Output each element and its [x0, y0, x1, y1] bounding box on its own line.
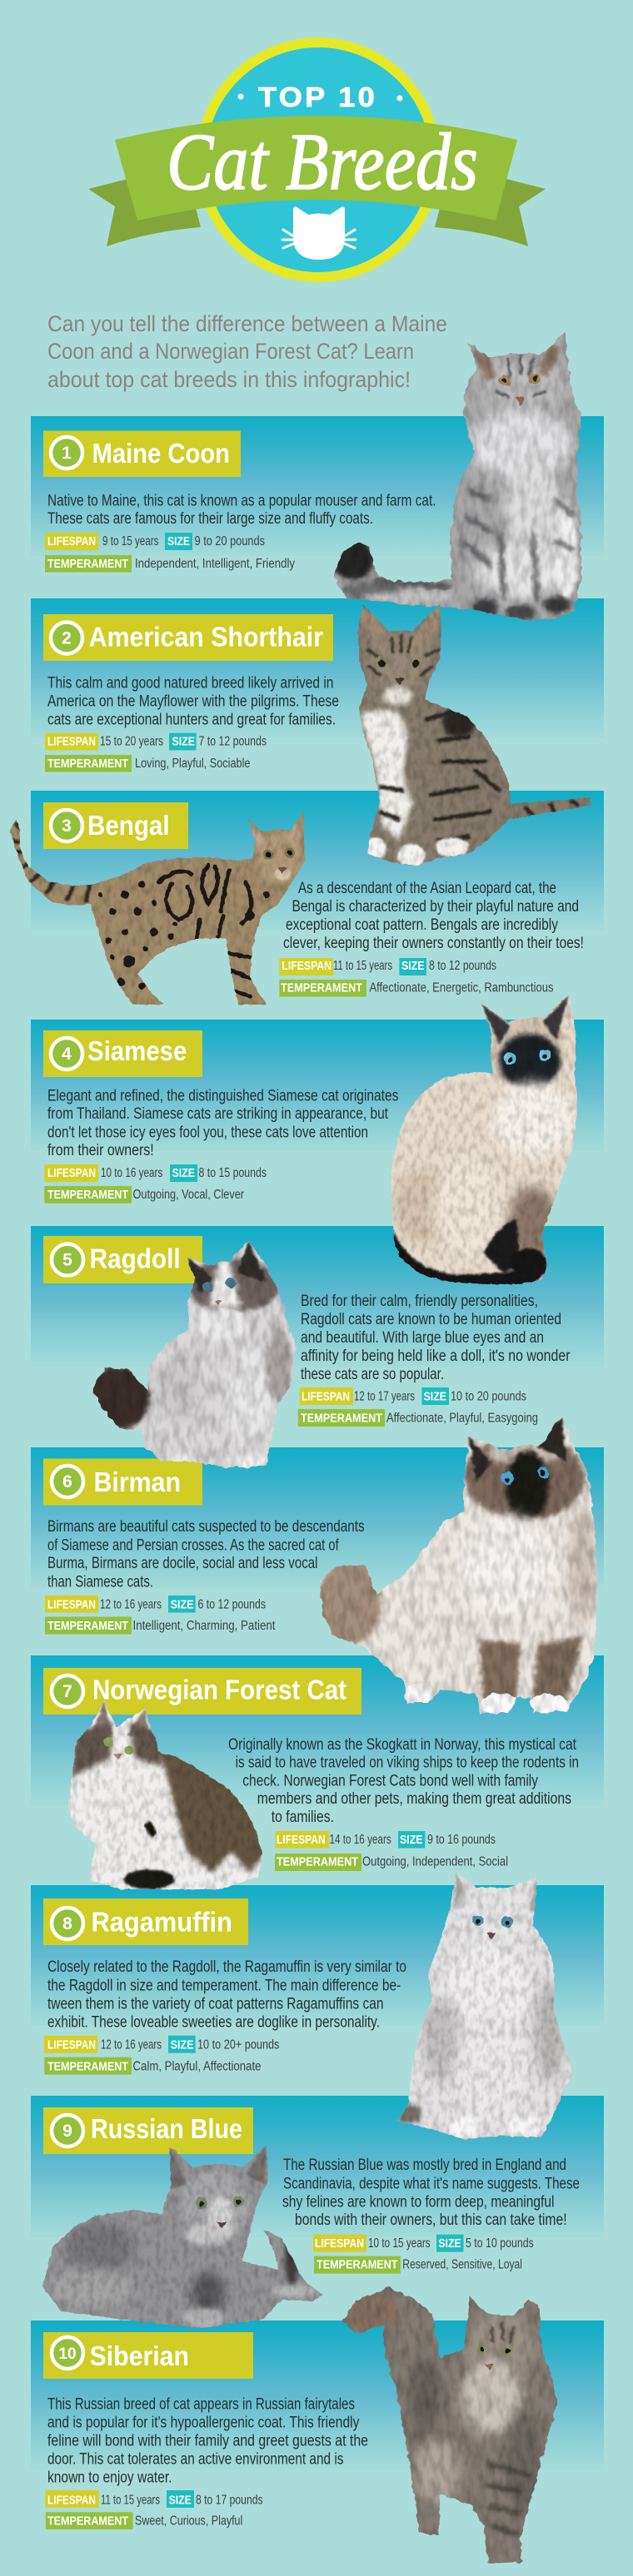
stats: American Shorthair: SIZE: [172, 735, 195, 749]
logo badge: [88, 37, 546, 282]
text block: Ragamuffin: tween them is the variety of coat patterns Ragamuffins can: [47, 1995, 383, 2013]
heading: Bengal: Bengal: [87, 810, 170, 841]
text block: Ragamuffin: Closely related to the Ragdoll, the Ragamuffin is very similar to: [47, 1958, 406, 1976]
stats: Norwegian Forest Cat: LIFESPAN: [277, 1833, 326, 1847]
heading: Ragdoll: Ragdoll: [90, 1243, 181, 1274]
text block: Siamese: don't let those icy eyes fool you, these cats love attention: [47, 1124, 368, 1141]
text block: Siberian: [47, 2395, 368, 2486]
heading: Norwegian Forest Cat: 7: [62, 1682, 72, 1701]
text block: Siberian: feline will bond with their family and greet guests at the: [47, 2432, 368, 2449]
text block: Siamese: Elegant and refined, the distinguished Siamese cat originates: [47, 1087, 398, 1105]
heading: Siamese: Siamese: [87, 1035, 187, 1066]
heading: Birman: Birman: [93, 1467, 181, 1497]
stats: Russian Blue: LIFESPAN: [315, 2236, 364, 2251]
stats: Russian Blue: Reserved, Sensitive, Loyal: [402, 2258, 522, 2272]
band: Russian Blue: [31, 2096, 604, 2237]
text block: Russian Blue: shy felines are known to form deep, meaningful: [282, 2194, 555, 2211]
stats: Norwegian Forest Cat: [275, 1831, 508, 1871]
cat: American Shorthair: [354, 599, 596, 870]
text block: Russian Blue: The Russian Blue was mostly bred in England and: [283, 2157, 566, 2174]
stats: Maine Coon: 9 to 20 pounds: [195, 534, 265, 548]
stats: Ragdoll: 12 to 17 years: [354, 1390, 415, 1403]
heading: Siberian: Siberian: [90, 2340, 189, 2371]
stats: Ragamuffin: SIZE: [171, 2038, 194, 2052]
stats: Norwegian Forest Cat: SIZE: [400, 1833, 423, 1847]
stats: Siamese: Outgoing, Vocal, Clever: [133, 1188, 244, 1202]
stats: Maine Coon: LIFESPAN: [47, 534, 96, 548]
band: Ragamuffin: [31, 1885, 604, 2025]
stats: Ragamuffin: LIFESPAN: [47, 2038, 96, 2052]
text block: Siberian: known to enjoy water.: [47, 2469, 172, 2486]
text block: Norwegian Forest Cat: check. Norwegian Forest Cats bond well with family: [242, 1773, 538, 1789]
cat: Russian Blue: [37, 2139, 329, 2332]
stats: Birman: Intelligent, Charming, Patient: [133, 1619, 276, 1633]
text block: American Shorthair: America on the Mayflower with the pilgrims. These: [47, 693, 339, 711]
text block: Siamese: [47, 1087, 398, 1159]
stats: Ragamuffin: [44, 2036, 280, 2075]
stats: Russian Blue: TEMPERAMENT: [316, 2258, 398, 2272]
heading: American Shorthair: [43, 614, 333, 661]
stats: Birman: 12 to 16 years: [100, 1598, 162, 1611]
band: Maine Coon: [31, 416, 604, 556]
intro text: about top cat breeds in this infographic!: [47, 367, 411, 392]
text block: Siberian: door. This cat tolerates an active environment and is: [47, 2450, 343, 2468]
top 10 text: [238, 82, 403, 112]
cat: Ragamuffin: [391, 1869, 579, 2143]
intro text: [47, 311, 447, 392]
stats: Siberian: TEMPERAMENT: [47, 2514, 128, 2529]
text block: Birman: Burma, Birmans are docile, social and less vocal: [47, 1555, 318, 1572]
stats: Russian Blue: 5 to 10 pounds: [466, 2236, 534, 2251]
heading: Maine Coon: Maine Coon: [92, 438, 230, 469]
stats: American Shorthair: [45, 733, 267, 772]
text block: Ragamuffin: exhibit. These loveable sweeties are doglike in personality.: [47, 2014, 380, 2032]
heading: Siamese: [43, 1030, 202, 1077]
band: American Shorthair: [31, 598, 604, 738]
text block: Bengal: [283, 880, 584, 952]
cat: Birman: [316, 1411, 604, 1719]
text block: Birman: [47, 1518, 365, 1591]
text block: Russian Blue: [282, 2157, 580, 2229]
text block: Ragdoll: [301, 1293, 571, 1383]
stats: Birman: LIFESPAN: [47, 1598, 96, 1611]
stats: Siamese: LIFESPAN: [47, 1166, 96, 1180]
band: Norwegian Forest Cat: [31, 1655, 604, 1805]
text block: Siamese: from Thailand. Siamese cats are striking in appearance, but: [47, 1105, 389, 1123]
stats: Ragdoll: TEMPERAMENT: [301, 1412, 382, 1426]
text block: American Shorthair: cats are exceptional hunters and great for families.: [47, 712, 336, 729]
band: Siberian: [31, 2320, 604, 2469]
cat: Bengal: [4, 807, 312, 1011]
text block: American Shorthair: [47, 674, 339, 729]
text block: Norwegian Forest Cat: [228, 1736, 579, 1826]
intro text: Can you tell the difference between a Maine: [47, 311, 447, 336]
stats: Maine Coon: [45, 533, 295, 573]
heading: Birman: [43, 1458, 202, 1505]
panel bands: [31, 416, 604, 2469]
ribbon: [115, 116, 517, 221]
stats: Ragamuffin: 12 to 16 years: [101, 2038, 162, 2052]
text block: Maine Coon: These cats are famous for their large size and fluffy coats.: [47, 510, 373, 528]
top 10 text: TOP 10: [258, 82, 377, 112]
stats: Ragdoll: Affectionate, Playful, Easygoing: [386, 1412, 538, 1426]
stats: American Shorthair: LIFESPAN: [47, 735, 96, 749]
heading: Russian Blue: 9: [62, 2122, 72, 2141]
stats: Ragdoll: SIZE: [423, 1390, 446, 1403]
heading: Norwegian Forest Cat: Norwegian Forest Cat: [92, 1674, 346, 1705]
text block: Ragdoll: affinity for being held like a doll, it's no wonder: [301, 1348, 571, 1365]
text block: Siberian: and is popular for it's hypoallergenic coat. This friendly: [47, 2414, 360, 2431]
text block: Birman: Birmans are beautiful cats suspected to be descendants: [47, 1518, 365, 1536]
stats: Bengal: Affectionate, Energetic, Rambunctious: [370, 980, 554, 995]
heading: Bengal: 3: [62, 816, 72, 836]
band: Siamese: [31, 1020, 604, 1151]
heading: Siamese: 4: [62, 1045, 72, 1064]
stats: Norwegian Forest Cat: 14 to 16 years: [330, 1833, 391, 1847]
stats: Bengal: [279, 958, 554, 997]
text block: Siamese: from their owners!: [47, 1142, 154, 1159]
stats: Maine Coon: 9 to 15 years: [102, 534, 159, 548]
stats: Birman: 6 to 12 pounds: [198, 1598, 266, 1611]
stats: Russian Blue: [313, 2235, 534, 2274]
stats: Norwegian Forest Cat: Outgoing, Independent, Social: [362, 1854, 508, 1869]
text block: Maine Coon: Native to Maine, this cat is known as a popular mouser and farm cat.: [47, 493, 436, 509]
stats: Birman: SIZE: [171, 1598, 194, 1611]
stats: Bengal: 8 to 12 pounds: [429, 959, 496, 973]
stats: Ragdoll: LIFESPAN: [302, 1390, 350, 1403]
cat: Norwegian Forest Cat: [65, 1698, 267, 1894]
heading: Siberian: 10: [58, 2345, 77, 2363]
stats: Siberian: Sweet, Curious, Playful: [135, 2514, 242, 2529]
cat: Ragdoll: [93, 1241, 297, 1468]
text block: Siberian: This Russian breed of cat appears in Russian fairytales: [47, 2395, 355, 2413]
ribbon tails: [88, 179, 546, 246]
stats: Siberian: SIZE: [169, 2493, 192, 2507]
text block: Russian Blue: bonds with their owners, but this can take time!: [295, 2211, 567, 2229]
stats: Birman: [45, 1596, 276, 1635]
heading: Ragamuffin: Ragamuffin: [92, 1906, 232, 1937]
stats: Siberian: 11 to 15 years: [101, 2493, 160, 2507]
stats: American Shorthair: Loving, Playful, Sociable: [135, 757, 250, 771]
heading: Russian Blue: Russian Blue: [91, 2113, 242, 2144]
heading: Birman: 6: [62, 1472, 72, 1491]
heading: American Shorthair: 2: [62, 629, 72, 648]
text block: Bengal: Bengal is characterized by their playful nature and: [292, 898, 579, 916]
text block: Norwegian Forest Cat: members and other pets, making them great additions: [257, 1790, 571, 1808]
text block: Birman: than Siamese cats.: [47, 1573, 153, 1591]
stats: American Shorthair: 7 to 12 pounds: [198, 735, 267, 749]
text block: Bengal: exceptional coat pattern. Bengals are incredibly: [286, 916, 558, 934]
stats: Bengal: TEMPERAMENT: [281, 980, 362, 995]
stats: Siberian: 8 to 17 pounds: [196, 2493, 263, 2507]
stats: Bengal: LIFESPAN: [282, 959, 331, 973]
stats: Norwegian Forest Cat: 9 to 16 pounds: [427, 1833, 496, 1847]
heading: Ragamuffin: [43, 1898, 248, 1945]
stats: Birman: TEMPERAMENT: [47, 1619, 128, 1633]
stats: Maine Coon: SIZE: [167, 534, 190, 548]
text block: Norwegian Forest Cat: to families.: [272, 1809, 334, 1826]
stats: Norwegian Forest Cat: TEMPERAMENT: [277, 1854, 358, 1869]
heading: Maine Coon: 1: [62, 444, 72, 463]
stats: Ragdoll: 10 to 20 pounds: [451, 1390, 526, 1403]
stats: Siamese: TEMPERAMENT: [47, 1188, 128, 1202]
stats: Russian Blue: 10 to 15 years: [368, 2236, 431, 2251]
stats: Ragdoll: [298, 1387, 538, 1427]
heading: Ragdoll: [43, 1236, 202, 1283]
stats: American Shorthair: TEMPERAMENT: [47, 757, 128, 771]
oval badge: [196, 37, 441, 282]
stats: Siamese: 10 to 16 years: [101, 1166, 162, 1180]
heading: Norwegian Forest Cat: [43, 1668, 361, 1715]
stats: Maine Coon: Independent, Intelligent, Friendly: [135, 557, 295, 571]
band: Birman: [31, 1447, 604, 1589]
stats: Ragamuffin: 10 to 20+ pounds: [197, 2038, 280, 2052]
text block: Bengal: As a descendant of the Asian Leopard cat, the: [298, 880, 556, 897]
text block: Birman: of Siamese and Persian crosses. As the sacred cat of: [47, 1536, 339, 1555]
intro text: Coon and a Norwegian Forest Cat? Learn: [47, 339, 414, 364]
stats: Bengal: 11 to 15 years: [333, 959, 392, 973]
text block: American Shorthair: This calm and good natured breed likely arrived in: [47, 674, 333, 692]
heading: Russian Blue: [43, 2107, 253, 2154]
heading: Ragamuffin: 8: [62, 1914, 72, 1933]
stats: Ragamuffin: Calm, Playful, Affectionate: [133, 2059, 262, 2073]
heading: Bengal: [43, 802, 188, 849]
band: Ragdoll: [31, 1226, 604, 1367]
heading: Maine Coon: [43, 431, 241, 477]
stats: Russian Blue: SIZE: [438, 2236, 461, 2251]
icon: cat head: [282, 206, 356, 260]
stats: Bengal: SIZE: [401, 959, 425, 973]
text block: Ragamuffin: [47, 1958, 406, 2032]
text block: Maine Coon: [47, 493, 436, 528]
band: Bengal: [31, 791, 604, 931]
stats: Siamese: 8 to 15 pounds: [198, 1166, 267, 1180]
text block: Ragdoll: Ragdoll cats are known to be human oriented: [301, 1311, 561, 1328]
text block: Ragdoll: these cats are so popular.: [301, 1366, 444, 1383]
stats: Siamese: SIZE: [172, 1166, 195, 1180]
cat: Maine Coon: [329, 329, 587, 624]
stats: Ragamuffin: TEMPERAMENT: [47, 2059, 128, 2073]
cat: Siberian: [337, 2285, 562, 2568]
stats: Maine Coon: TEMPERAMENT: [47, 557, 128, 571]
stats: Siberian: [45, 2490, 263, 2529]
text block: Ragamuffin: the Ragdoll in size and temperament. The main difference be-: [47, 1977, 401, 1994]
stats: American Shorthair: 15 to 20 years: [100, 735, 163, 749]
stats: Siamese: [44, 1164, 267, 1204]
heading: Siberian: [43, 2332, 253, 2379]
text block: Ragdoll: Bred for their calm, friendly personalities,: [301, 1293, 538, 1310]
title script: Cat Breeds: [167, 117, 478, 207]
cat: Siamese: [387, 990, 583, 1290]
heading: American Shorthair: American Shorthair: [89, 621, 323, 652]
stats: Siberian: LIFESPAN: [47, 2493, 96, 2507]
text block: Ragdoll: and beautiful. With large blue eyes and an: [301, 1329, 544, 1347]
heading: Ragdoll: 5: [62, 1251, 72, 1270]
